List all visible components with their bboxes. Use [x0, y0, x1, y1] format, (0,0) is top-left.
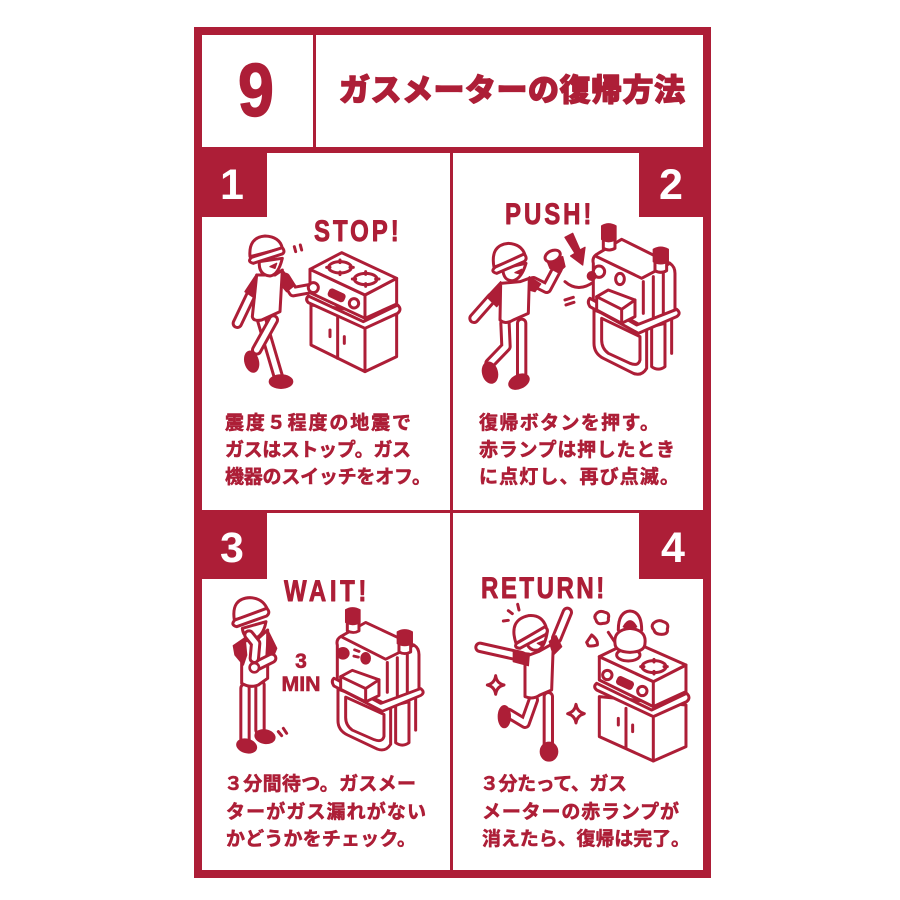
- heading STOP: STOP!: [314, 213, 399, 248]
- description 1: 機器のスイッチをオフ。: [225, 466, 431, 488]
- description 1: 震度５程度の地震で: [225, 412, 411, 434]
- description 4: ３分たって、ガス: [480, 773, 627, 795]
- header: title: ガスメーターの復帰方法: [339, 73, 685, 108]
- number badge 4: 4: [661, 524, 685, 572]
- illustration: person pushing button: [474, 233, 594, 392]
- description 2: に点灯し、再び点滅。: [479, 465, 679, 488]
- number badge 4: [639, 513, 710, 579]
- panel 2: push: [453, 153, 710, 510]
- three minutes label: 3: [295, 650, 307, 673]
- number badge 1: 1: [220, 161, 244, 209]
- illustration: person waiting: [233, 598, 287, 755]
- description 2: 復帰ボタンを押す。: [479, 412, 659, 434]
- panel 1: stop: [202, 153, 450, 510]
- description 4: メーターの赤ランプが: [482, 800, 679, 823]
- header: section number: 9: [238, 48, 274, 132]
- number badge 2: [639, 153, 710, 217]
- description 3: かどうかをチェック。: [226, 828, 416, 850]
- number badge 2: 2: [659, 161, 683, 209]
- description 2: 赤ランプは押したとき: [479, 439, 675, 461]
- description 1: ガスはストップ。ガス: [225, 439, 411, 461]
- illustration: person jumping: [480, 604, 584, 761]
- description 3: ターがガス漏れがない: [226, 800, 426, 823]
- heading WAIT: WAIT!: [284, 573, 366, 608]
- panel 4: return: [453, 513, 710, 870]
- heading RETURN: RETURN!: [481, 570, 604, 605]
- panel 3: wait: [202, 513, 450, 870]
- illustration: stove with kettle: [587, 611, 689, 761]
- illustration: stove: [307, 253, 400, 372]
- description 4: 消えたら、復帰は完了。: [482, 828, 690, 850]
- number badge 3: 3: [220, 524, 244, 572]
- heading PUSH: PUSH!: [505, 196, 591, 231]
- number badge 3: [202, 513, 267, 579]
- outer frame: [194, 27, 711, 878]
- number badge 1: [202, 153, 267, 217]
- three minutes label: MIN: [282, 673, 320, 696]
- illustration: gas meter: [587, 224, 679, 374]
- illustration: person touching stove: [237, 236, 312, 388]
- description 3: ３分間待つ。ガスメー: [224, 773, 416, 795]
- illustration: gas meter: [332, 608, 423, 750]
